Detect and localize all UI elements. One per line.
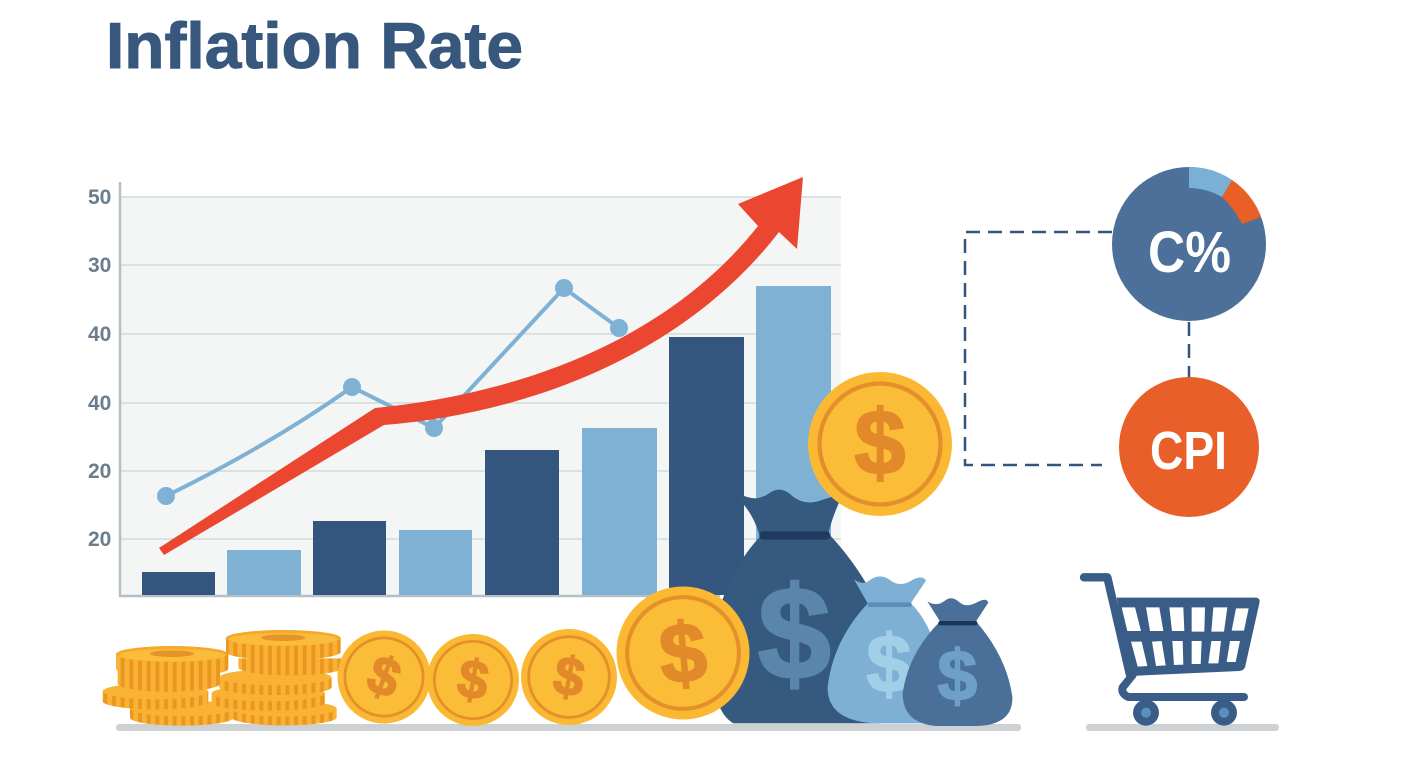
money bag large: $ (758, 560, 831, 707)
money bag small (903, 598, 1012, 726)
top coin: $ (854, 392, 906, 494)
small coins: $ (453, 648, 493, 712)
small coins: $ (360, 644, 408, 710)
cart shadow (1086, 724, 1279, 731)
title: Inflation Rate (106, 9, 523, 82)
bar chart (88, 177, 841, 596)
ground shadow (116, 724, 1021, 731)
money bag large (712, 490, 880, 723)
large coin centre (611, 581, 755, 725)
arrow: rising trend (159, 177, 803, 555)
axis labels: 20 (88, 460, 111, 483)
dashed connectors (965, 232, 1189, 465)
large coin centre: $ (656, 604, 710, 702)
icon: shopping cart (1084, 577, 1260, 726)
coin stacks (103, 630, 343, 726)
money bag medium: $ (866, 619, 912, 710)
axis labels: 40 (88, 392, 111, 415)
small coins (324, 617, 625, 737)
axis labels: 40 (88, 323, 111, 346)
CPI badge (1119, 377, 1259, 517)
top coin (808, 372, 952, 516)
small coins: $ (549, 645, 589, 709)
axis labels: 20 (88, 528, 111, 551)
axis labels: 50 (88, 186, 111, 209)
pie: C% (1112, 167, 1266, 321)
pie: C%: C% (1148, 220, 1231, 285)
money bag small: $ (937, 636, 977, 716)
bars (142, 286, 831, 596)
line series (157, 279, 628, 505)
axis labels: 30 (88, 254, 111, 277)
money bag medium (828, 576, 953, 723)
axis labels (88, 186, 111, 551)
CPI badge: CPI (1150, 421, 1227, 481)
